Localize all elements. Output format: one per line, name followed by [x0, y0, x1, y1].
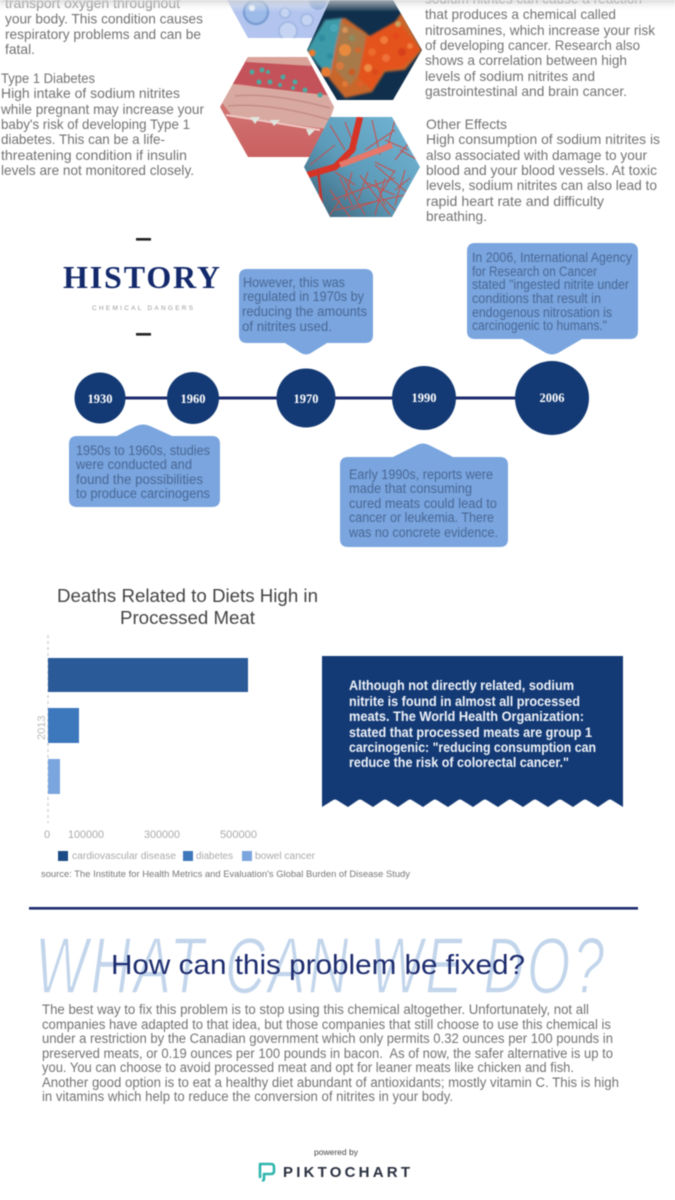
callout: 2006: endogenous nitrosation is: [472, 305, 612, 320]
heading: history: HISTORY: [63, 259, 220, 295]
text block: other effects: Other Effects: [426, 116, 507, 132]
text block: respiratory effects: fatal.: [5, 41, 35, 57]
node 1970: 1970: [294, 392, 318, 406]
callout: 1990s: made that consuming: [349, 481, 472, 496]
text block: solution paragraph: Another good option is to eat a healthy diet abundant of antioxidants; mostly vitamin C. This is high: [42, 1075, 619, 1090]
callout: World Health Organization note: stated that processed meats are group 1: [349, 724, 592, 740]
callout: 1990s: cancer or leukemia. There: [349, 510, 494, 525]
callout: World Health Organization note: carcinogenic: "reducing consumption can: [349, 739, 596, 755]
bar: cardiovascular disease: [48, 658, 248, 692]
icon: Piktochart logo: [260, 1164, 274, 1180]
node 2006: [515, 361, 589, 435]
callout: 1970: reducing the amounts: [242, 304, 367, 319]
callout: 1970: of nitrites used.: [242, 319, 332, 334]
legend: diabetes: [196, 851, 233, 862]
callout: 1990s: Early 1990s, reports were: [349, 467, 493, 482]
footer: powered by Piktochart: powered by: [314, 1148, 358, 1157]
callout: 1990s: was no concrete evidence.: [348, 525, 498, 540]
callout: 1950s to 1960s: were conducted and: [75, 457, 192, 472]
node 1960: 1960: [180, 392, 206, 406]
node 1990: 1990: [412, 391, 436, 405]
text block: solution paragraph: under a restriction by the Canadian government which only permits 0.32 ounces per 100 pounds in: [42, 1031, 613, 1046]
chart title: Processed Meat: [120, 608, 255, 628]
text block: respiratory effects: your body. This condition causes: [5, 10, 203, 26]
callout: 1950s to 1960s: 1950s to 1960s, studies: [76, 443, 210, 458]
axis tick labels: 300000: [144, 829, 180, 841]
text block: solution paragraph: [42, 1002, 619, 1104]
text block: other effects: blood and your blood vessels. At toxic: [426, 162, 657, 178]
text block: other effects: also associated with damage to your: [426, 147, 647, 163]
heading: how can this problem be fixed: How can this problem be fixed?: [111, 949, 525, 980]
callout: 2006: In 2006, International Agency: [472, 250, 632, 265]
text block: other effects: breathing.: [426, 208, 487, 224]
node 1990: [392, 366, 456, 430]
text block: cancer effects: nitrosamines, which increase your risk: [425, 22, 656, 38]
callout: 1950s to 1960s: to produce carcinogens: [76, 486, 210, 501]
bar chart: deaths related to diets high in processed meat: [36, 586, 410, 880]
hexagon: blood vessels: [302, 115, 422, 219]
callout: 1970: [239, 269, 373, 354]
text block: type 1 diabetes: threatening condition if insulin: [1, 147, 187, 163]
hexagon: artery with plaque: [218, 55, 336, 159]
chart title: [57, 586, 318, 628]
source note: source: The Institute for Health Metrics and Evaluation's Global Burden of Disease Study: [41, 869, 410, 880]
bar: diabetes: [48, 708, 79, 743]
node 2006: 2006: [540, 391, 564, 405]
text block: type 1 diabetes: levels are not monitored closely.: [1, 162, 194, 178]
callout: World Health Organization note: nitrite is found in almost all processed: [349, 693, 580, 709]
timeline: [74, 361, 589, 435]
callout: 1990s: cured meats could lead to: [349, 496, 497, 511]
heading: history: CHEMICAL DANGERS: [92, 305, 193, 312]
text block: cancer effects: that produces a chemical called: [425, 6, 616, 22]
bar: bowel cancer: [48, 759, 60, 794]
axis tick labels: [44, 829, 257, 841]
text block: respiratory effects: [5, 0, 203, 57]
text block: type 1 diabetes: baby's risk of developing Type 1: [1, 116, 190, 132]
text block: type 1 diabetes: diabetes. This can be a life-: [1, 131, 165, 147]
callout: 2006: carcinogenic to humans.": [472, 318, 607, 333]
text block: other effects: levels, sodium nitrites can also lead to: [426, 177, 657, 193]
callout: 2006: [467, 243, 638, 354]
callout: World Health Organization note: meats. The World Health Organization:: [349, 708, 584, 724]
section divider: [29, 907, 638, 910]
heading: history: [63, 238, 220, 336]
legend: [58, 851, 316, 862]
callout: 1950s to 1960s: [69, 424, 220, 507]
text block: type 1 diabetes: [0, 70, 204, 178]
callout: 2006: conditions that result in: [472, 291, 601, 306]
text block: other effects: High consumption of sodium nitrites is: [426, 131, 660, 147]
text block: type 1 diabetes: High intake of sodium nitrites: [1, 85, 180, 101]
hexagon: water bubbles: [228, 0, 330, 38]
text block: respiratory effects: respiratory problems and can be: [5, 26, 201, 42]
callout: World Health Organization note: [322, 656, 623, 807]
axis tick labels: 100000: [68, 829, 104, 841]
text block: solution paragraph: The best way to fix this problem is to stop using this chemical altogether. Unfortunately, not all: [42, 1002, 589, 1017]
callout: 1970: regulated in 1970s by: [243, 289, 364, 304]
text block: cancer effects: shows a correlation between high: [425, 52, 627, 68]
callout: World Health Organization note: Although not directly related, sodium: [349, 677, 574, 693]
axis label: year: 2013: [36, 716, 48, 740]
callout: World Health Organization note: reduce the risk of colorectal cancer.": [349, 754, 569, 770]
chart title: Deaths Related to Diets High in: [57, 586, 318, 606]
footer: powered by Piktochart: PIKTOCHART: [283, 1164, 410, 1181]
text block: cancer effects: gastrointestinal and brain cancer.: [425, 83, 627, 99]
legend: cardiovascular disease: [72, 851, 176, 862]
text block: solution paragraph: in vitamins which help to reduce the conversion of nitrites in your body.: [42, 1089, 453, 1104]
axis tick labels: 500000: [220, 829, 257, 841]
text block: type 1 diabetes: Type 1 Diabetes: [1, 70, 95, 86]
hexagon: cancer cell: [305, 0, 425, 100]
text block: solution paragraph: companies have adapted to that idea, but those companies that still choose to use this chemical is: [42, 1017, 611, 1032]
node 1930: [74, 372, 126, 424]
node 1930: 1930: [88, 392, 112, 406]
text block: other effects: [426, 116, 660, 224]
footer: powered by Piktochart: [260, 1148, 410, 1181]
callout: 1950s to 1960s: found the possibilities: [76, 472, 203, 487]
axis tick labels: 0: [44, 829, 50, 841]
icon: hexagon image collage: [218, 0, 425, 219]
callout: 1990s: [340, 444, 508, 547]
legend: bowel cancer: [255, 851, 316, 862]
callout: 2006: for Research on Cancer: [472, 264, 597, 279]
callout: 1970: However, this was: [243, 275, 345, 290]
node 1970: [276, 368, 336, 428]
callout: 2006: stated "ingested nitrite under: [472, 277, 629, 292]
timeline line: [100, 396, 552, 400]
text block: cancer effects: of developing cancer. Research also: [425, 37, 640, 53]
node 1960: [167, 372, 219, 424]
text block: cancer effects: levels of sodium nitrites and: [425, 68, 595, 84]
text block: type 1 diabetes: while pregnant may increase your: [0, 101, 204, 117]
text block: other effects: rapid heart rate and difficulty: [426, 193, 604, 209]
text block: cancer effects: [425, 0, 656, 99]
text block: solution paragraph: preserved meats, or 0.19 ounces per 100 pounds in bacon. As of now, the safer alternative is up to: [42, 1046, 613, 1061]
text block: solution paragraph: you. You can choose to avoid processed meat and opt for leaner meats like chicken and fish.: [42, 1060, 574, 1075]
top edge shadow: [0, 0, 675, 12]
